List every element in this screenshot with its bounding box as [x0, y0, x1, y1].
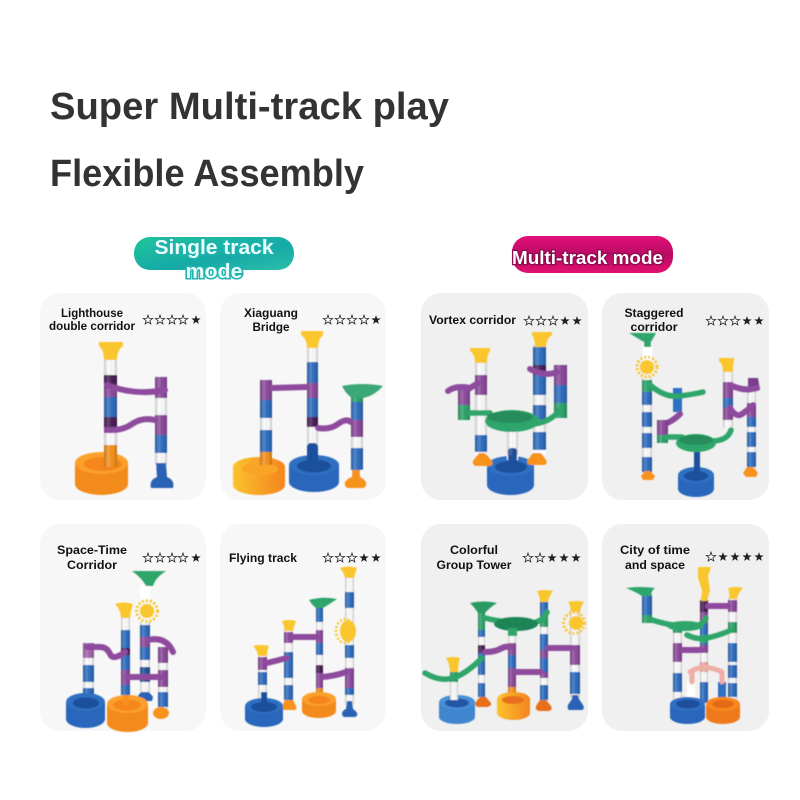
marble run	[626, 567, 743, 724]
label: Xiaguang	[244, 306, 298, 320]
label: corridor	[630, 320, 678, 334]
label: Flying track	[229, 551, 297, 565]
difficulty stars	[323, 315, 381, 324]
difficulty stars	[523, 553, 581, 562]
marble run	[75, 342, 173, 495]
badge: single track mode	[134, 237, 294, 283]
marble run	[425, 590, 584, 724]
difficulty stars	[706, 316, 764, 325]
label	[620, 543, 690, 572]
badge: multi-track mode	[512, 236, 673, 273]
badge: single track mode: Single track	[154, 237, 274, 259]
title: Flexible Assembly	[50, 153, 364, 195]
difficulty stars	[323, 553, 381, 562]
label	[624, 306, 684, 334]
label	[436, 543, 512, 572]
label: Colorful	[450, 543, 498, 557]
label: Space-Time	[57, 543, 127, 557]
panel: Space-Time Corridor	[40, 524, 206, 732]
panel: Vortex corridor	[421, 293, 588, 500]
card background	[40, 524, 206, 731]
marble run	[233, 331, 383, 495]
difficulty stars	[143, 315, 201, 324]
label: Bridge	[252, 320, 290, 334]
label	[244, 306, 298, 334]
panel: Lighthouse double corridor	[40, 293, 206, 500]
label: City of time	[620, 543, 690, 557]
card background	[602, 293, 769, 500]
label	[49, 306, 135, 333]
card background	[602, 524, 769, 731]
panel: Staggered corridor	[602, 293, 769, 500]
card background	[421, 293, 588, 500]
card background	[220, 524, 386, 731]
panel: Flying track	[220, 524, 386, 731]
label: Lighthouse	[61, 306, 123, 320]
difficulty stars	[143, 553, 201, 562]
badge: multi-track mode: Multi-track mode	[512, 248, 663, 268]
label: Corridor	[67, 558, 117, 572]
label: Group Tower	[436, 558, 512, 572]
difficulty stars	[524, 316, 582, 325]
title	[50, 86, 449, 195]
marble run	[245, 566, 357, 727]
label: double corridor	[49, 319, 135, 333]
marble run	[66, 571, 173, 732]
label	[57, 543, 127, 572]
panel: Colorful Group Tower	[421, 524, 588, 731]
label: Staggered	[624, 306, 684, 320]
card background	[421, 524, 588, 731]
card background	[40, 293, 206, 500]
label: and space	[625, 558, 685, 572]
title: Super Multi-track play	[50, 86, 449, 128]
badge: single track mode: mode	[186, 261, 242, 283]
difficulty stars	[706, 552, 764, 561]
marble run	[448, 332, 567, 495]
card background	[220, 293, 386, 500]
panel: Xiaguang Bridge	[220, 293, 386, 500]
panel: City of time and space	[602, 524, 769, 731]
marble run	[629, 333, 760, 497]
label: Vortex corridor	[429, 313, 516, 327]
